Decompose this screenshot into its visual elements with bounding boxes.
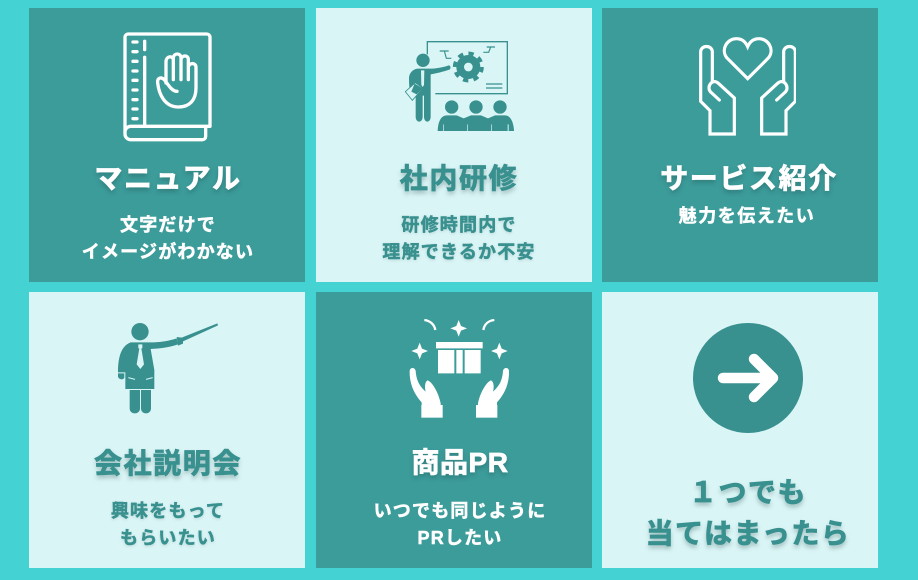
heading: サービス紹介 [660,163,838,194]
heading: 社内研修 [400,163,518,194]
heading [646,477,850,551]
heading: 商品PR [412,447,508,478]
heading: 当てはまったら [646,518,850,549]
icon: manual book with hand [123,32,212,142]
icon: hands holding heart [699,37,796,136]
text block: もらいたい [120,528,216,548]
text block [82,215,254,262]
icon: presenter with gear and audience [404,41,514,131]
panel: manual [29,8,305,282]
icon: arrow in circle [693,323,803,433]
text block: 研修時間内で [401,215,517,235]
icon: person with pointer [118,323,218,414]
text block: 理解できるか不安 [382,242,536,262]
text block: いつでも同じように [374,501,546,521]
panel: service introduction [602,8,878,282]
panel: company briefing [29,292,305,568]
heading: 会社説明会 [94,448,242,479]
panel: product PR [316,292,592,568]
icon: hands lifting a box [410,318,509,418]
text block: 興味をもって [111,501,225,521]
text block [374,501,546,548]
panel: internal training [316,8,592,282]
heading: マニュアル [94,163,242,194]
text block: PRしたい [417,528,502,548]
text block [382,215,536,262]
text block: イメージがわかない [82,242,254,262]
text block [111,501,225,548]
panel: call to action [602,292,878,568]
heading: １つでも [689,477,807,508]
text block: 文字だけで [120,215,216,235]
text block: 魅力を伝えたい [679,206,815,226]
